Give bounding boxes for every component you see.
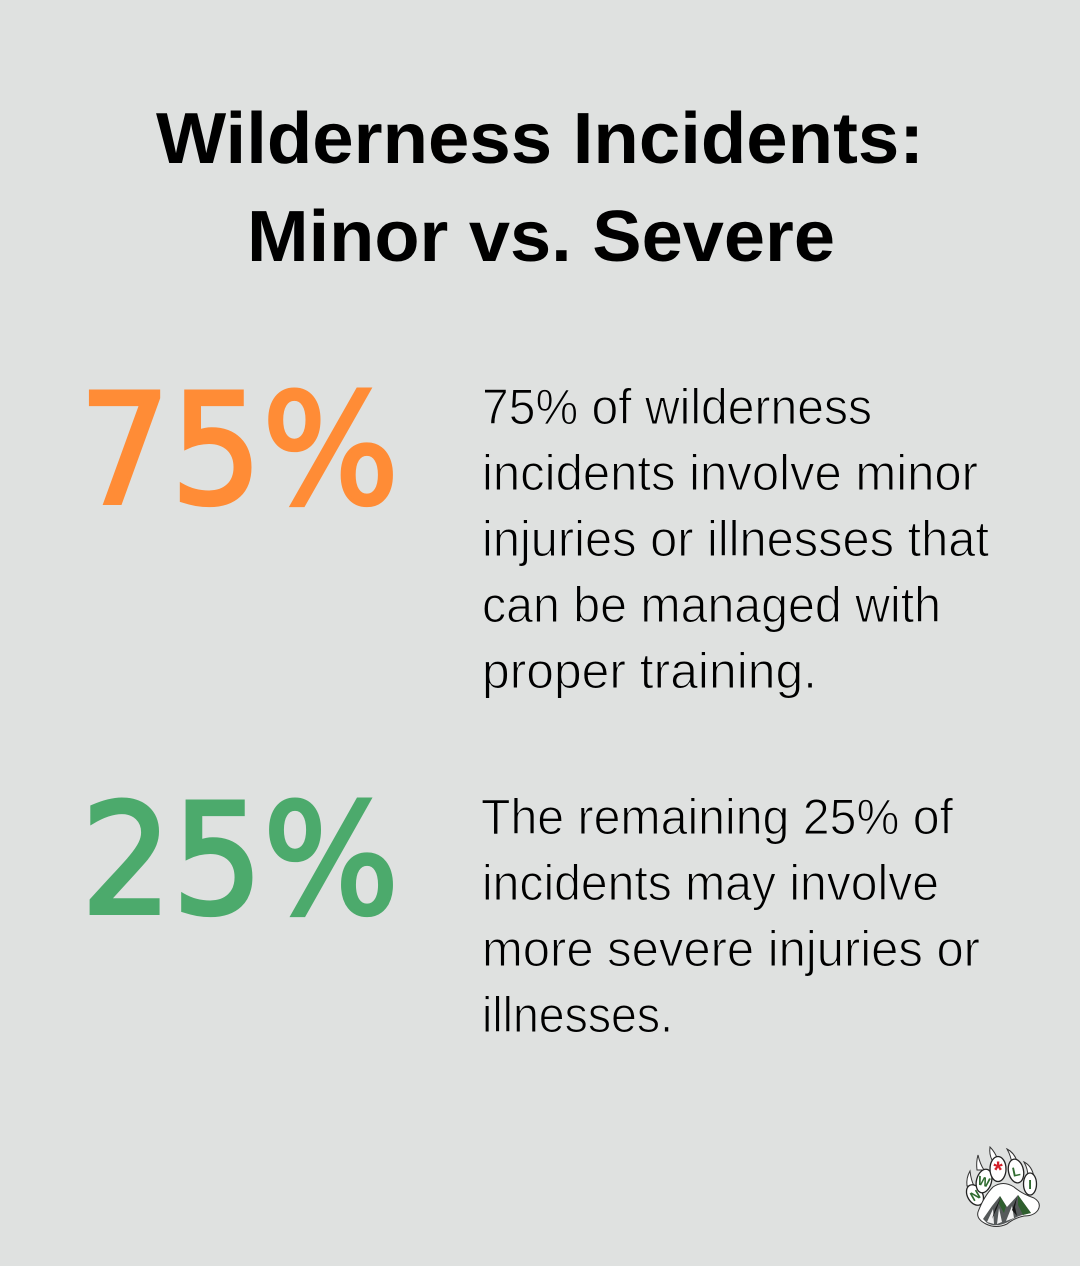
text block: minor incidents: incidents involve minor xyxy=(482,445,978,501)
title: Wilderness Incidents: xyxy=(156,99,924,179)
text block: minor incidents: can be managed with xyxy=(482,577,941,633)
toes xyxy=(963,1156,1036,1208)
text block: minor incidents xyxy=(482,379,989,699)
title: Minor vs. Severe xyxy=(247,197,835,277)
toe letters: N xyxy=(967,1187,983,1204)
text block: severe incidents: incidents may involve xyxy=(482,855,939,911)
paw pad xyxy=(978,1184,1039,1226)
toe letters: L xyxy=(1011,1163,1022,1180)
text block: severe incidents: The remaining 25% of xyxy=(481,789,953,845)
text block: minor incidents: 75% of wilderness xyxy=(482,379,872,435)
stat: 75%: 75% xyxy=(79,362,399,540)
toe letters: I xyxy=(1028,1177,1032,1192)
text block: severe incidents: more severe injuries or xyxy=(482,921,980,977)
text block: severe incidents xyxy=(481,789,980,1043)
toe letters: * xyxy=(993,1157,1003,1184)
toe letters xyxy=(967,1157,1032,1204)
claws xyxy=(967,1147,1034,1186)
text block: minor incidents: injuries or illnesses that xyxy=(482,511,989,567)
stat: 25%: 25% xyxy=(81,772,399,950)
icon: bear paw logo xyxy=(963,1147,1039,1226)
text block: severe incidents: illnesses. xyxy=(482,987,673,1043)
text block: minor incidents: proper training. xyxy=(482,643,817,699)
title xyxy=(156,99,924,277)
toe letters: W xyxy=(976,1173,992,1191)
mountains xyxy=(983,1195,1031,1225)
